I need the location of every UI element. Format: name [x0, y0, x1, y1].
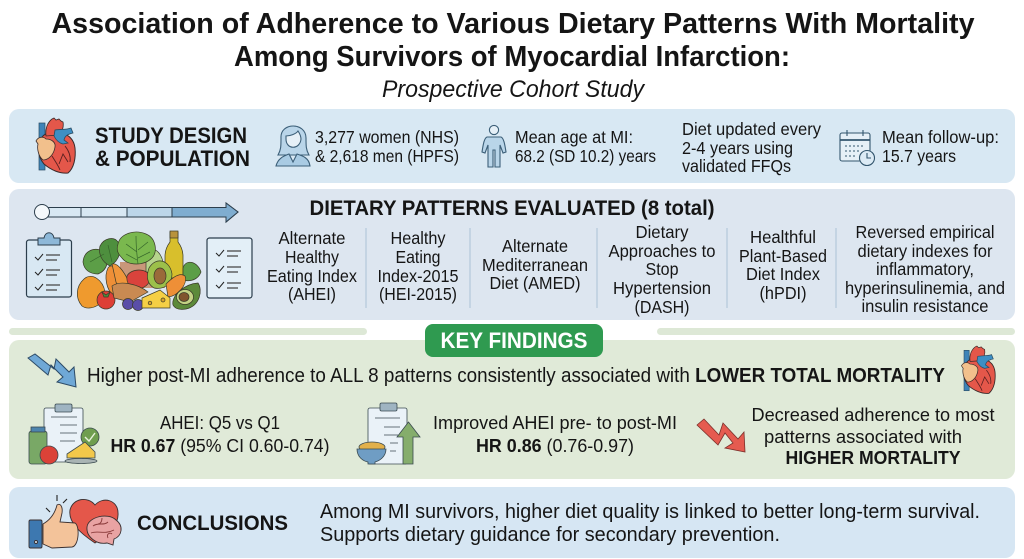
text: mean age — [515, 127, 656, 166]
text: DASH: (DASH) — [634, 297, 690, 317]
text: AHEI: (AHEI) — [288, 284, 336, 304]
badge: key findings: KEY FINDINGS — [440, 328, 588, 353]
text: reversed empirical indexes: hyperinsulinemia, and — [845, 278, 1005, 298]
panel: conclusions — [9, 487, 1015, 558]
text: follow-up: 15.7 years — [882, 146, 956, 166]
text: AMED: Mediterranean — [482, 255, 588, 275]
icon: man — [482, 125, 506, 167]
text: improved AHEI hazard ratio — [433, 413, 677, 456]
text: conclusions body: Supports dietary guidance for secondary prevention. — [320, 523, 780, 546]
icon: healthy food pile — [77, 231, 201, 310]
text: improved AHEI hazard ratio: Improved AHEI pre- to post-MI — [433, 413, 677, 433]
heading: conclusions: CONCLUSIONS — [137, 511, 288, 535]
text: main finding: Higher post-MI adherence to ALL 8 patterns consistently associated with LOWER TOTAL MORTALITY — [87, 365, 946, 387]
heading: study design — [95, 123, 250, 171]
icon: clipboard checklist — [26, 233, 72, 297]
title: Prospective Cohort Study — [382, 76, 646, 103]
text: hPDI: Diet Index — [746, 264, 820, 284]
text: reversed empirical indexes — [845, 222, 1005, 316]
text: HEI-2015: (HEI-2015) — [379, 284, 457, 304]
text: decreased adherence: HIGHER MORTALITY — [786, 447, 961, 468]
icon: woman — [276, 126, 310, 166]
text: AHEI: Healthy — [285, 247, 339, 267]
text: DASH: Stop — [646, 259, 678, 279]
heading: study design: & POPULATION — [95, 146, 250, 171]
text: AHEI — [267, 228, 357, 304]
text: participants: 3,277 women (NHS) — [315, 127, 459, 147]
text: HEI-2015: Index-2015 — [378, 266, 458, 286]
text: AHEI hazard ratio: AHEI: Q5 vs Q1 — [160, 413, 280, 433]
text: decreased adherence: patterns associated with — [764, 426, 962, 447]
text: HEI-2015: Eating — [396, 247, 440, 267]
text: hPDI: Healthful — [750, 227, 816, 247]
title: Among Survivors of Myocardial Infarction: — [234, 41, 790, 73]
icon: checklist — [207, 238, 252, 298]
panel: dietary patterns evaluated — [9, 189, 1015, 320]
icon: heart — [961, 346, 995, 393]
text: hPDI: Plant-Based — [739, 246, 827, 266]
text: DASH — [608, 222, 716, 317]
text: mean age: Mean age at MI: — [515, 127, 633, 147]
icon: anatomical heart — [36, 118, 75, 173]
text: reversed empirical indexes: inflammatory, — [876, 259, 974, 279]
text: follow-up — [882, 127, 999, 166]
text: conclusions body: Among MI survivors, higher diet quality is linked to better long-term survival. — [320, 500, 980, 523]
icon: timeline arrow — [34, 203, 238, 222]
badge: key findings — [425, 324, 603, 357]
panel: study design and population — [9, 109, 1015, 183]
text: AHEI hazard ratio — [110, 413, 330, 456]
text: AMED: Diet (AMED) — [490, 273, 580, 293]
text: AMED: Alternate — [502, 236, 568, 256]
text: HEI-2015: Healthy — [390, 228, 446, 248]
icon: calendar and clock — [840, 130, 874, 166]
text: reversed empirical indexes: insulin resistance — [862, 296, 988, 316]
panel: key findings — [9, 324, 1015, 479]
text: DASH: Hypertension — [613, 278, 711, 298]
text: participants: & 2,618 men (HPFS) — [315, 146, 459, 166]
text: reversed empirical indexes: Reversed empirical — [856, 222, 994, 242]
icon: thumbs up with heart and brain — [29, 495, 121, 548]
text: mean age: 68.2 (SD 10.2) years — [515, 146, 656, 166]
text: HEI-2015 — [378, 228, 458, 304]
text: DASH: Dietary — [636, 222, 689, 242]
text: diet updates: 2-4 years using — [682, 138, 793, 158]
text: hPDI — [739, 227, 827, 303]
text: conclusions body — [320, 500, 980, 546]
heading: study design: STUDY DESIGN — [95, 123, 247, 148]
text: AHEI: Alternate — [278, 228, 346, 248]
text: diet updates — [682, 119, 821, 176]
icon: blue downward arrow — [28, 354, 76, 387]
text: DASH: Approaches to — [608, 241, 716, 261]
text: decreased adherence — [752, 404, 994, 468]
heading: dietary patterns: DIETARY PATTERNS EVALUATED (8 total) — [310, 197, 714, 220]
text: improved AHEI hazard ratio: HR 0.86 (0.76-0.97) — [476, 436, 634, 456]
text: AMED — [482, 236, 588, 293]
title — [52, 8, 974, 103]
icon: clipboard with food — [29, 404, 99, 464]
icon: red downward arrow — [697, 419, 745, 452]
icon: clipboard with bowl and arrow — [357, 403, 420, 464]
text: AHEI hazard ratio: HR 0.67 (95% CI 0.60-0.74) — [110, 436, 330, 456]
text: hPDI: (hPDI) — [760, 283, 806, 303]
text: decreased adherence: Decreased adherence to most — [752, 404, 994, 425]
text: diet updates: validated FFQs — [682, 156, 791, 176]
text: reversed empirical indexes: dietary indexes for — [858, 241, 993, 261]
text: participants — [315, 127, 459, 166]
text: follow-up: Mean follow-up: — [882, 127, 999, 147]
title: Association of Adherence to Various Dietary Patterns With Mortality — [52, 8, 974, 40]
text: diet updates: Diet updated every — [682, 119, 821, 139]
text: AHEI: Eating Index — [267, 266, 357, 286]
